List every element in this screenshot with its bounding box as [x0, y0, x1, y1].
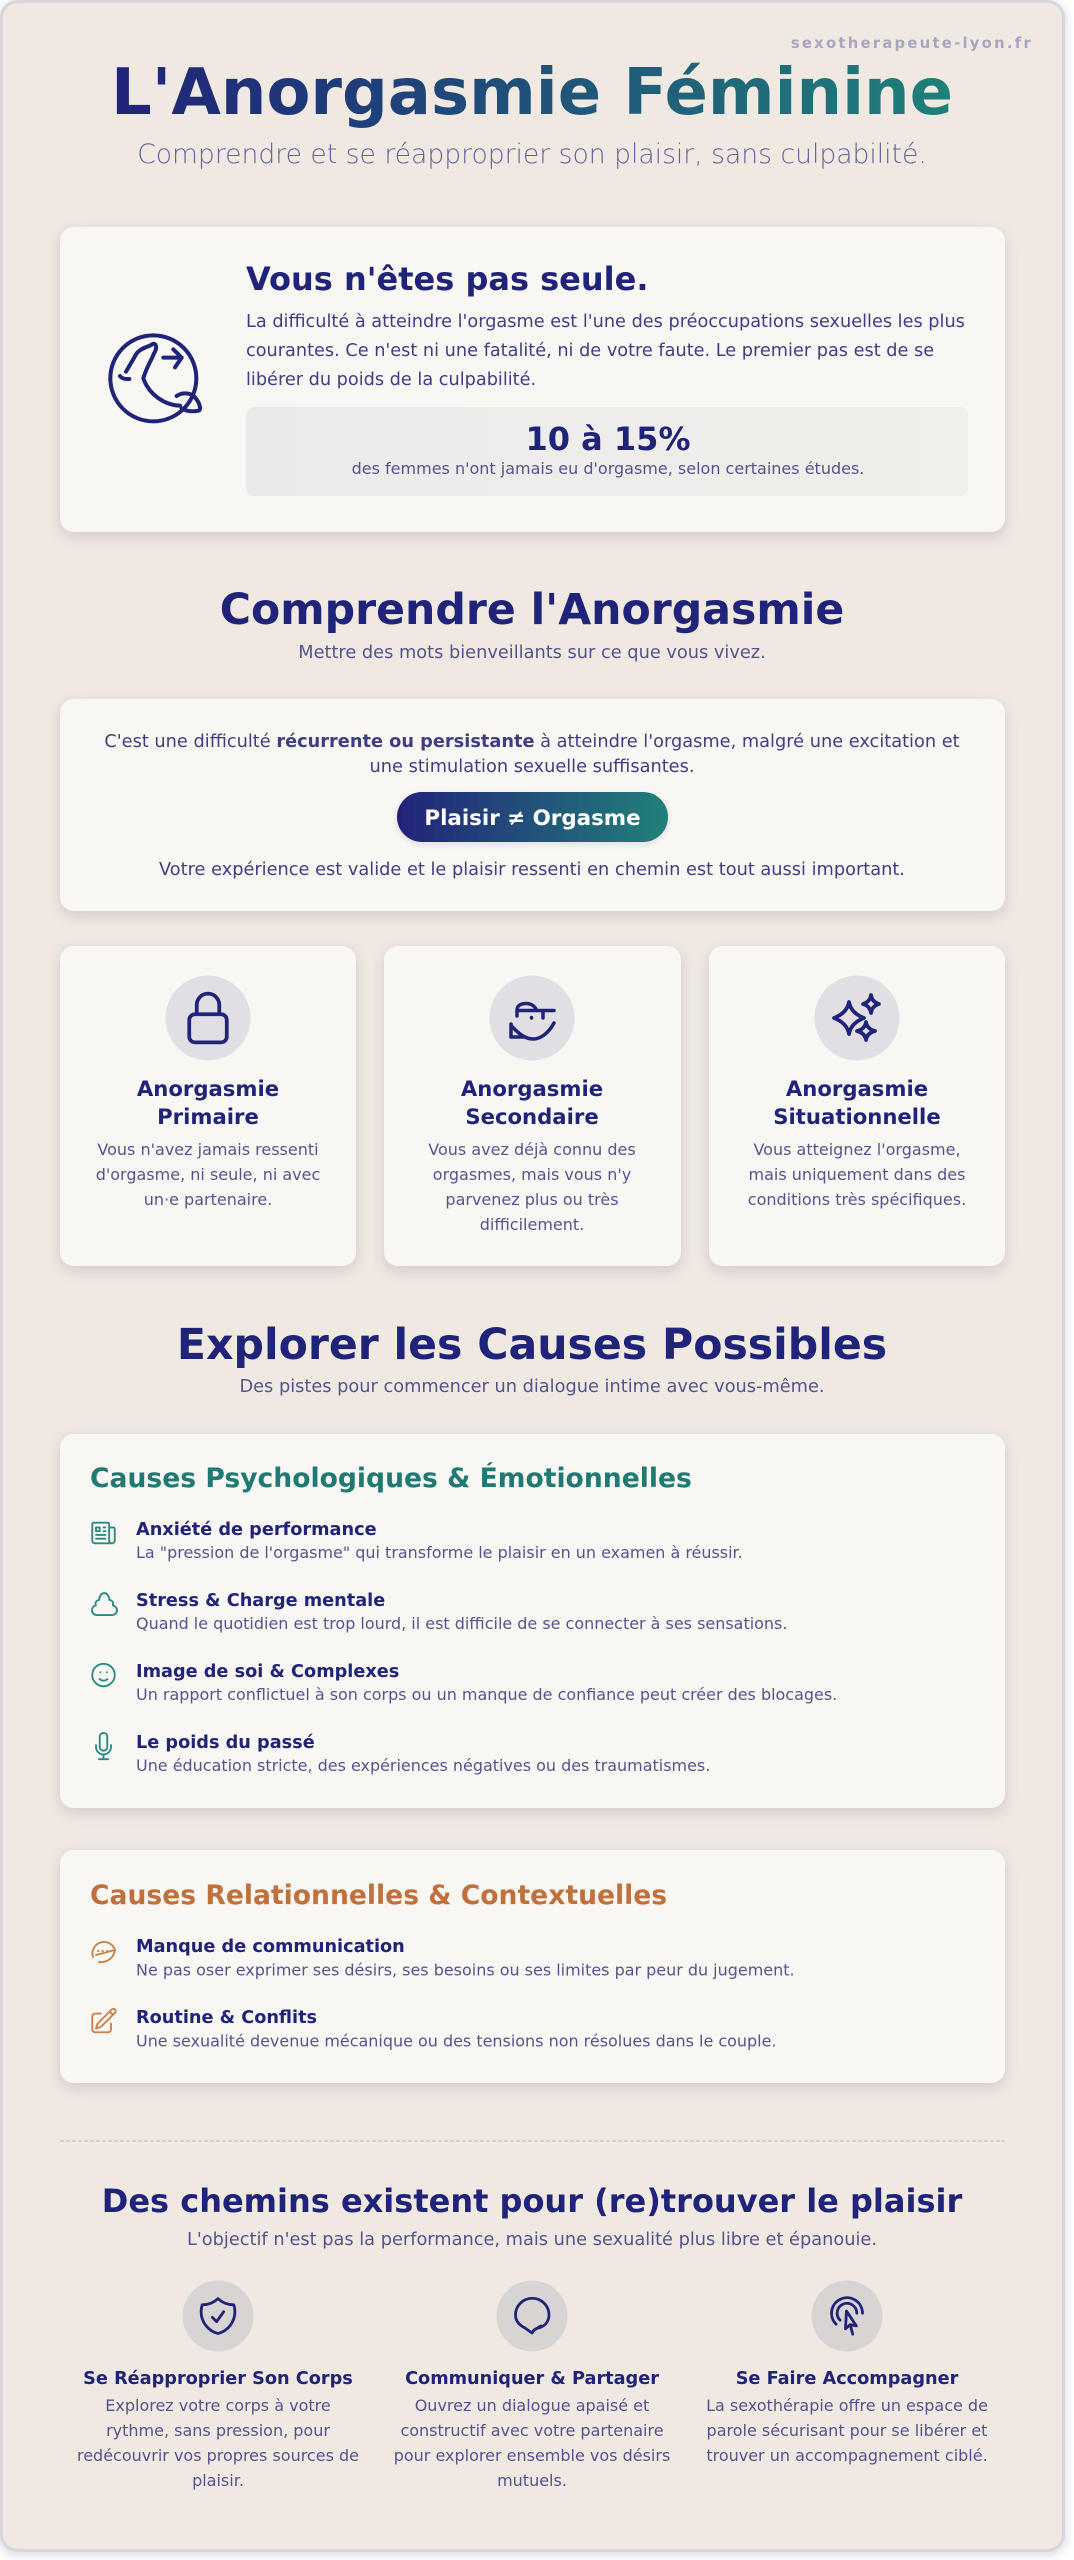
card title: Secondaire: [465, 1104, 599, 1129]
heading: vous n'êtes pas seule: Vous n'êtes pas seule.: [246, 260, 648, 298]
text: trouver un accompagnement ciblé.: [706, 2446, 988, 2465]
card: anorgasmie situationnelle: [709, 946, 1005, 1266]
text: Explorez votre corps à votre: [105, 2396, 331, 2415]
solution: se réapproprier son corps: [77, 2280, 359, 2490]
item: stress: Quand le quotidien est trop lourd, il est difficile de se connecter à ses sensations.: [136, 1614, 787, 1633]
card title: Situationnelle: [773, 1104, 941, 1129]
heading: des chemins existent: Des chemins existent pour (re)trouver le plaisir: [102, 2182, 962, 2220]
panel: causes psychologiques: [60, 1434, 1005, 1808]
paragraph: [246, 312, 965, 390]
solution: communiquer & partager: [394, 2280, 670, 2490]
definition text: C'est une difficulté récurrente ou persistante à atteindre l'orgasme, malgré une excitation et: [104, 732, 960, 752]
pill: plaisir ≠ orgasme: [397, 792, 668, 842]
section subtitle: causes: Des pistes pour commencer un dialogue intime avec vous-même.: [239, 1377, 825, 1397]
text: [706, 2396, 988, 2465]
paragraph: La difficulté à atteindre l'orgasme est l'une des préoccupations sexuelles les plus: [246, 312, 965, 332]
card title: Anorgasmie: [786, 1076, 928, 1101]
stat box: 10 à 15%: 10 à 15%: [526, 420, 690, 458]
text: redécouvrir vos propres sources de: [77, 2446, 359, 2465]
item: le poids du passé: Une éducation stricte, des expériences négatives ou des traumatismes.: [136, 1756, 710, 1775]
stat box: 10 à 15%: [246, 407, 968, 496]
item: manque de communication: Manque de communication: [136, 1937, 405, 1957]
card: anorgasmie secondaire: [384, 946, 681, 1266]
title: Communiquer & Partager: [405, 2369, 659, 2389]
heading: explorer les causes: Explorer les Causes Possibles: [177, 1320, 887, 1370]
text: rythme, sans pression, pour: [106, 2421, 330, 2440]
card text: difficilement.: [480, 1215, 584, 1234]
panel heading: Causes Psychologiques & Émotionnelles: [90, 1462, 692, 1494]
item: le poids du passé: [96, 1733, 710, 1775]
title: Se Réapproprier Son Corps: [83, 2369, 353, 2389]
card text: parvenez plus ou très: [445, 1190, 619, 1209]
icon: shield: [182, 2280, 254, 2352]
text: plaisir.: [192, 2471, 244, 2490]
icon: sparkles: [814, 976, 900, 1060]
item: manque de communication: Ne pas oser exprimer ses désirs, ses besoins ou ses limites par peur du jugement.: [136, 1960, 795, 1980]
card: anorgasmie primaire: [60, 946, 356, 1266]
text: [394, 2396, 670, 2490]
item: image de soi: [92, 1662, 837, 1704]
card title: [773, 1076, 941, 1129]
text: constructif avec votre partenaire: [400, 2421, 664, 2440]
icon: lock: [166, 976, 250, 1060]
item: routine & conflits: [92, 2008, 776, 2050]
panel: definition: [60, 699, 1005, 911]
icon: cursor ripple: [812, 2280, 882, 2352]
item: stress: [92, 1591, 787, 1633]
solution: se faire accompagner: [706, 2280, 988, 2465]
card text: [428, 1140, 636, 1234]
section subtitle: comprendre: Mettre des mots bienveillants sur ce que vous vivez.: [298, 643, 766, 663]
card title: Primaire: [157, 1104, 259, 1129]
panel: causes relationnelles: [60, 1850, 1005, 2083]
card title: [461, 1076, 603, 1129]
title: Se Faire Accompagner: [736, 2369, 959, 2389]
text: parole sécurisant pour se libérer et: [707, 2421, 987, 2440]
pill: plaisir ≠ orgasme: Plaisir ≠ Orgasme: [424, 806, 641, 831]
card text: [96, 1140, 320, 1209]
icon: speech bubble: [496, 2280, 568, 2352]
section subtitle: chemins: L'objectif n'est pas la performance, mais une sexualité plus libre et épanouie.: [187, 2230, 877, 2250]
panel heading: Causes Relationnelles & Contextuelles: [90, 1880, 667, 1911]
item: manque de communication: [92, 1937, 795, 1980]
text: mutuels.: [497, 2471, 567, 2490]
item: anxiété de performance: [92, 1520, 743, 1562]
text: La sexothérapie offre un espace de: [706, 2396, 988, 2415]
subtitle: Comprendre et se réapproprier son plaisir, sans culpabilité.: [137, 139, 927, 170]
card text: [748, 1140, 966, 1209]
item: le poids du passé: Le poids du passé: [136, 1733, 315, 1753]
item: image de soi: Image de soi & Complexes: [136, 1662, 399, 1682]
closing sentence: Votre expérience est valide et le plaisir ressenti en chemin est tout aussi important.: [159, 860, 905, 880]
definition text: une stimulation sexuelle suffisantes.: [370, 757, 694, 777]
panel: vous n'êtes pas seule: [60, 227, 1005, 532]
icon: returning smile: [490, 976, 574, 1060]
card text: d'orgasme, ni seule, ni avec: [96, 1165, 320, 1184]
item: stress: Stress & Charge mentale: [136, 1591, 385, 1611]
definition text: [104, 732, 960, 777]
item: anxiété de performance: Anxiété de performance: [136, 1520, 377, 1540]
website label: sexotherapeute-lyon.fr: [791, 35, 1033, 52]
item: anxiété de performance: La "pression de l'orgasme" qui transforme le plaisir en un examen à réussir.: [136, 1543, 743, 1562]
text: [77, 2396, 359, 2490]
item: image de soi: Un rapport conflictuel à son corps ou un manque de confiance peut créer des blocages.: [136, 1685, 837, 1704]
icon: clock with moon: [110, 335, 200, 421]
card text: Vous n'avez jamais ressenti: [97, 1140, 319, 1159]
heading: comprendre: Comprendre l'Anorgasmie: [220, 585, 844, 635]
text: Ouvrez un dialogue apaisé et: [415, 2396, 649, 2415]
card title: Anorgasmie: [461, 1076, 603, 1101]
text: pour explorer ensemble vos désirs: [394, 2446, 670, 2465]
card text: Vous avez déjà connu des: [428, 1140, 636, 1159]
card text: un·e partenaire.: [144, 1190, 272, 1209]
item: routine & conflits: Une sexualité devenue mécanique ou des tensions non résolues dans le couple.: [136, 2032, 776, 2050]
card text: mais uniquement dans des: [749, 1165, 965, 1184]
card title: [137, 1076, 279, 1129]
paragraph: libérer du poids de la culpabilité.: [246, 370, 536, 390]
paragraph: courantes. Ce n'est ni une fatalité, ni de votre faute. Le premier pas est de se: [246, 341, 934, 361]
title: L'Anorgasmie Féminine: [111, 56, 953, 130]
card text: conditions très spécifiques.: [748, 1190, 966, 1209]
card text: Vous atteignez l'orgasme,: [753, 1140, 961, 1159]
card title: Anorgasmie: [137, 1076, 279, 1101]
stat box: 10 à 15%: des femmes n'ont jamais eu d'orgasme, selon certaines études.: [352, 459, 864, 478]
card text: orgasmes, mais vous n'y: [433, 1165, 631, 1184]
item: routine & conflits: Routine & Conflits: [136, 2008, 317, 2028]
